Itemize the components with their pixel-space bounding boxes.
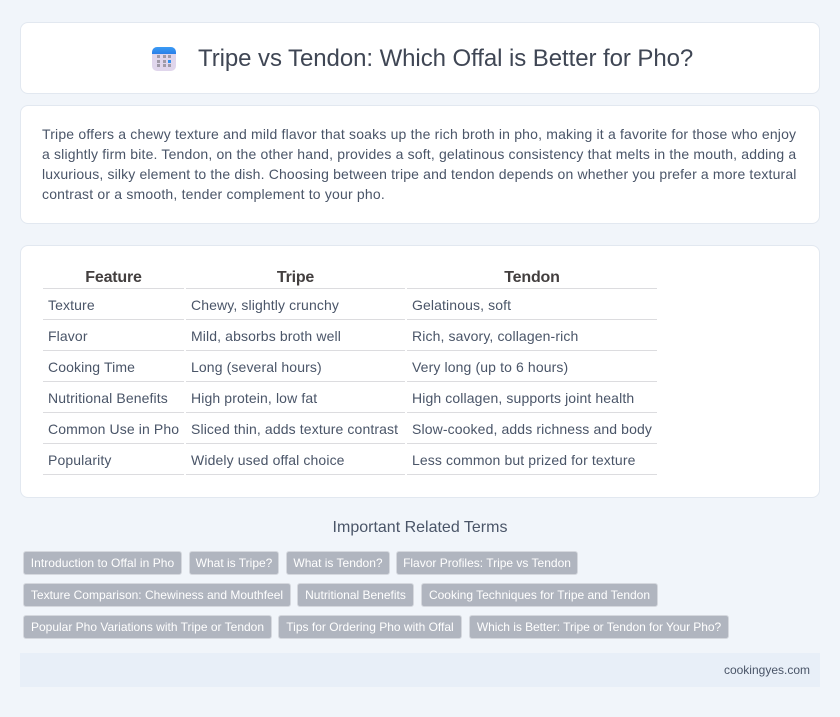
icon: calendar — [152, 47, 176, 71]
comparison table: Rich, savory, collagen-rich — [412, 328, 578, 344]
comparison table: Gelatinous, soft — [412, 297, 511, 313]
intro paragraph: a slightly firm bite. Tendon, on the other hand, provides a soft, gelatinous consistency that melts in the mouth, adding a — [42, 146, 796, 162]
related term tags: Texture Comparison: Chewiness and Mouthfeel — [31, 588, 283, 602]
related term tags: Flavor Profiles: Tripe vs Tendon — [403, 556, 571, 570]
footer bar — [20, 653, 820, 687]
comparison table: Slow-cooked, adds richness and body — [412, 421, 652, 437]
related term tags: Cooking Techniques for Tripe and Tendon — [429, 588, 650, 602]
header card — [20, 22, 820, 94]
related term tags: Introduction to Offal in Pho — [31, 556, 174, 570]
related term tags: Tips for Ordering Pho with Offal — [286, 620, 454, 634]
comparison table: Tendon — [504, 269, 560, 286]
comparison table: Tripe — [277, 269, 314, 286]
comparison table: Mild, absorbs broth well — [191, 328, 341, 344]
related term tags: Nutritional Benefits — [305, 588, 406, 602]
panel: intro text — [20, 105, 820, 224]
comparison table: Feature — [85, 269, 142, 286]
related term tags: Which is Better: Tripe or Tendon for Your Pho? — [477, 620, 721, 634]
related term tags: What is Tendon? — [293, 556, 383, 570]
comparison table: Chewy, slightly crunchy — [191, 297, 339, 313]
comparison table: Widely used offal choice — [191, 452, 345, 468]
comparison table: High collagen, supports joint health — [412, 390, 634, 406]
intro paragraph: Tripe offers a chewy texture and mild flavor that soaks up the rich broth in pho, making it a favorite for those who enjoy — [42, 126, 796, 142]
comparison table: Flavor — [48, 328, 88, 344]
intro paragraph: luxurious, silky element to the dish. Choosing between tripe and tendon depends on whether you prefer a more textural — [42, 166, 797, 182]
comparison table: Less common but prized for texture — [412, 452, 636, 468]
related term tags: Popular Pho Variations with Tripe or Tendon — [31, 620, 264, 634]
related term tags: What is Tripe? — [196, 556, 272, 570]
intro paragraph — [42, 126, 797, 202]
footer credit: cookingyes.com — [724, 663, 810, 677]
title: Tripe vs Tendon: Which Offal is Better for Pho? — [198, 45, 693, 72]
comparison table: Popularity — [48, 452, 111, 468]
comparison table — [43, 269, 657, 475]
panel: comparison table — [20, 245, 820, 498]
comparison table: Long (several hours) — [191, 359, 322, 375]
comparison table: Common Use in Pho — [48, 421, 179, 437]
comparison table: Nutritional Benefits — [48, 390, 168, 406]
heading: important related terms: Important Related Terms — [333, 519, 507, 536]
comparison table: Very long (up to 6 hours) — [412, 359, 568, 375]
comparison table: Texture — [48, 297, 95, 313]
related term tags — [23, 551, 729, 639]
intro paragraph: contrast or a smooth, tender complement to your pho. — [42, 186, 385, 202]
comparison table: High protein, low fat — [191, 390, 317, 406]
comparison table: Sliced thin, adds texture contrast — [191, 421, 398, 437]
comparison table: Cooking Time — [48, 359, 135, 375]
